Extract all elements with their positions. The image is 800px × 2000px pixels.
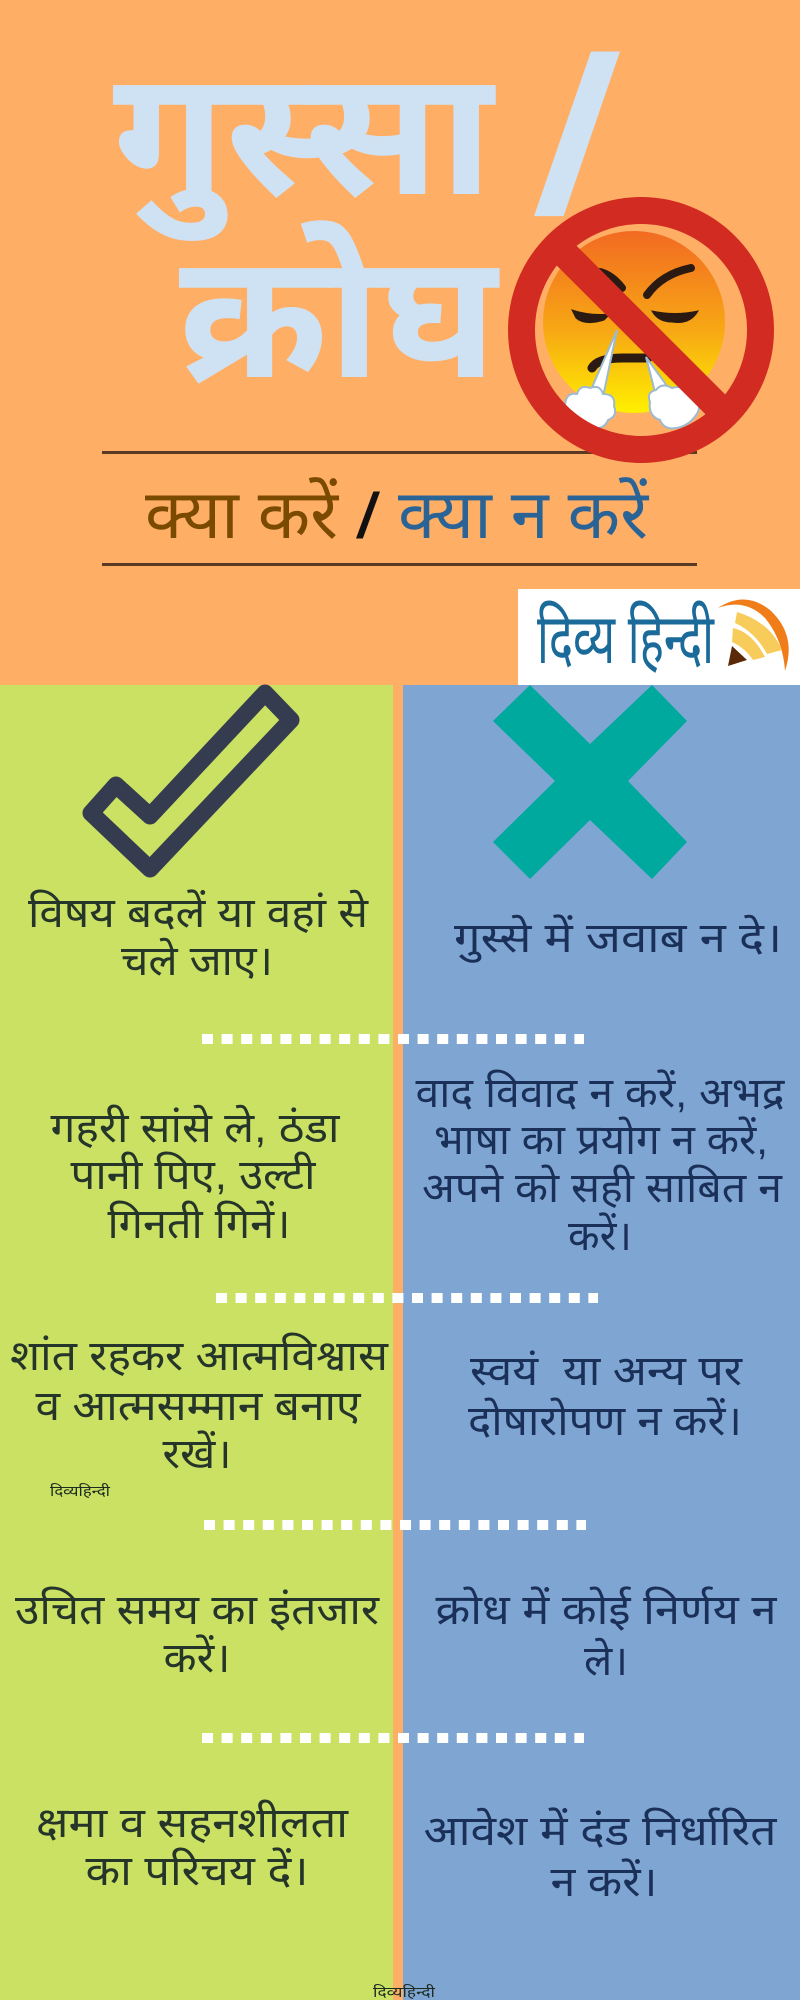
subtitle: / bbox=[356, 480, 380, 552]
text: do 1: चले जाए। bbox=[121, 937, 273, 984]
watermark 2: दिव्यहिन्दी bbox=[373, 1984, 435, 2000]
center strip bbox=[393, 685, 403, 2000]
text: do 3 bbox=[10, 1332, 389, 1477]
text: don't 4 bbox=[436, 1586, 777, 1684]
panel: don't column bbox=[403, 685, 800, 2000]
text: do 4 bbox=[15, 1586, 380, 1681]
title: / bbox=[539, 15, 616, 257]
icon: cross mark bbox=[493, 685, 687, 879]
text: do 3: रखें। bbox=[162, 1430, 232, 1477]
text: do 5: का परिचय दें। bbox=[86, 1847, 308, 1894]
subtitle rules bbox=[102, 451, 697, 566]
icon: angry face with prohibition sign bbox=[522, 210, 760, 450]
text: don't 5 bbox=[424, 1807, 778, 1905]
header background bbox=[0, 0, 800, 685]
icon: check mark bbox=[91, 693, 291, 869]
text: don't 2 bbox=[416, 1069, 785, 1259]
text: don't 2: भाषा का प्रयोग न करें, bbox=[434, 1116, 768, 1163]
text: do 4: करें। bbox=[164, 1634, 230, 1681]
panel: do column bbox=[0, 685, 393, 2000]
title: गुस्सा bbox=[113, 37, 497, 241]
title bbox=[113, 15, 616, 415]
text: do 5: क्षमा व सहनशीलता bbox=[36, 1799, 349, 1846]
text: don't 3: दोषारोपण न करें। bbox=[468, 1397, 742, 1444]
text: don't 2: करें। bbox=[568, 1212, 632, 1259]
text: do 4: उचित समय का इंतजार bbox=[15, 1586, 380, 1633]
text: do 2 bbox=[50, 1104, 341, 1247]
text: don't 5: आवेश में दंड निर्धारित bbox=[424, 1807, 778, 1854]
title: क्रोघ bbox=[179, 220, 500, 415]
text: don't 3: स्वयं या अन्य पर bbox=[470, 1347, 743, 1394]
text: do 1 bbox=[28, 889, 369, 984]
text: don't 4: ले। bbox=[584, 1637, 628, 1684]
text: do 1: विषय बदलें या वहां से bbox=[28, 889, 369, 936]
watermark 1: दिव्यहिन्दी bbox=[50, 1483, 110, 1499]
text: don't 3 bbox=[468, 1347, 743, 1444]
subtitle: क्या न करें bbox=[398, 477, 649, 553]
text: do 3: व आत्मसम्मान बनाए bbox=[36, 1382, 361, 1429]
divider 1 bbox=[202, 1034, 584, 1044]
divider 4 bbox=[202, 1733, 584, 1743]
text: do 2: गहरी सांसे ले, ठंडा bbox=[50, 1104, 341, 1151]
divider 2 bbox=[216, 1293, 598, 1303]
subtitle: क्या करें bbox=[145, 477, 339, 553]
text: do 2: पानी पिए, उल्टी bbox=[70, 1151, 317, 1198]
text: do 5 bbox=[36, 1799, 349, 1894]
text: don't 4: क्रोध में कोई निर्णय न bbox=[436, 1586, 777, 1633]
text: don't 2: वाद विवाद न करें, अभद्र bbox=[416, 1069, 785, 1116]
text: don't 1: गुस्से में जवाब न दे। bbox=[454, 914, 782, 963]
divider 3 bbox=[204, 1520, 586, 1530]
subtitle bbox=[145, 477, 649, 553]
text: do 3: शांत रहकर आत्मविश्वास bbox=[10, 1332, 389, 1379]
text: don't 5: न करें। bbox=[550, 1858, 658, 1905]
text: don't 2: अपने को सही साबित न bbox=[422, 1164, 783, 1211]
text: do 2: गिनती गिनें। bbox=[108, 1200, 290, 1247]
